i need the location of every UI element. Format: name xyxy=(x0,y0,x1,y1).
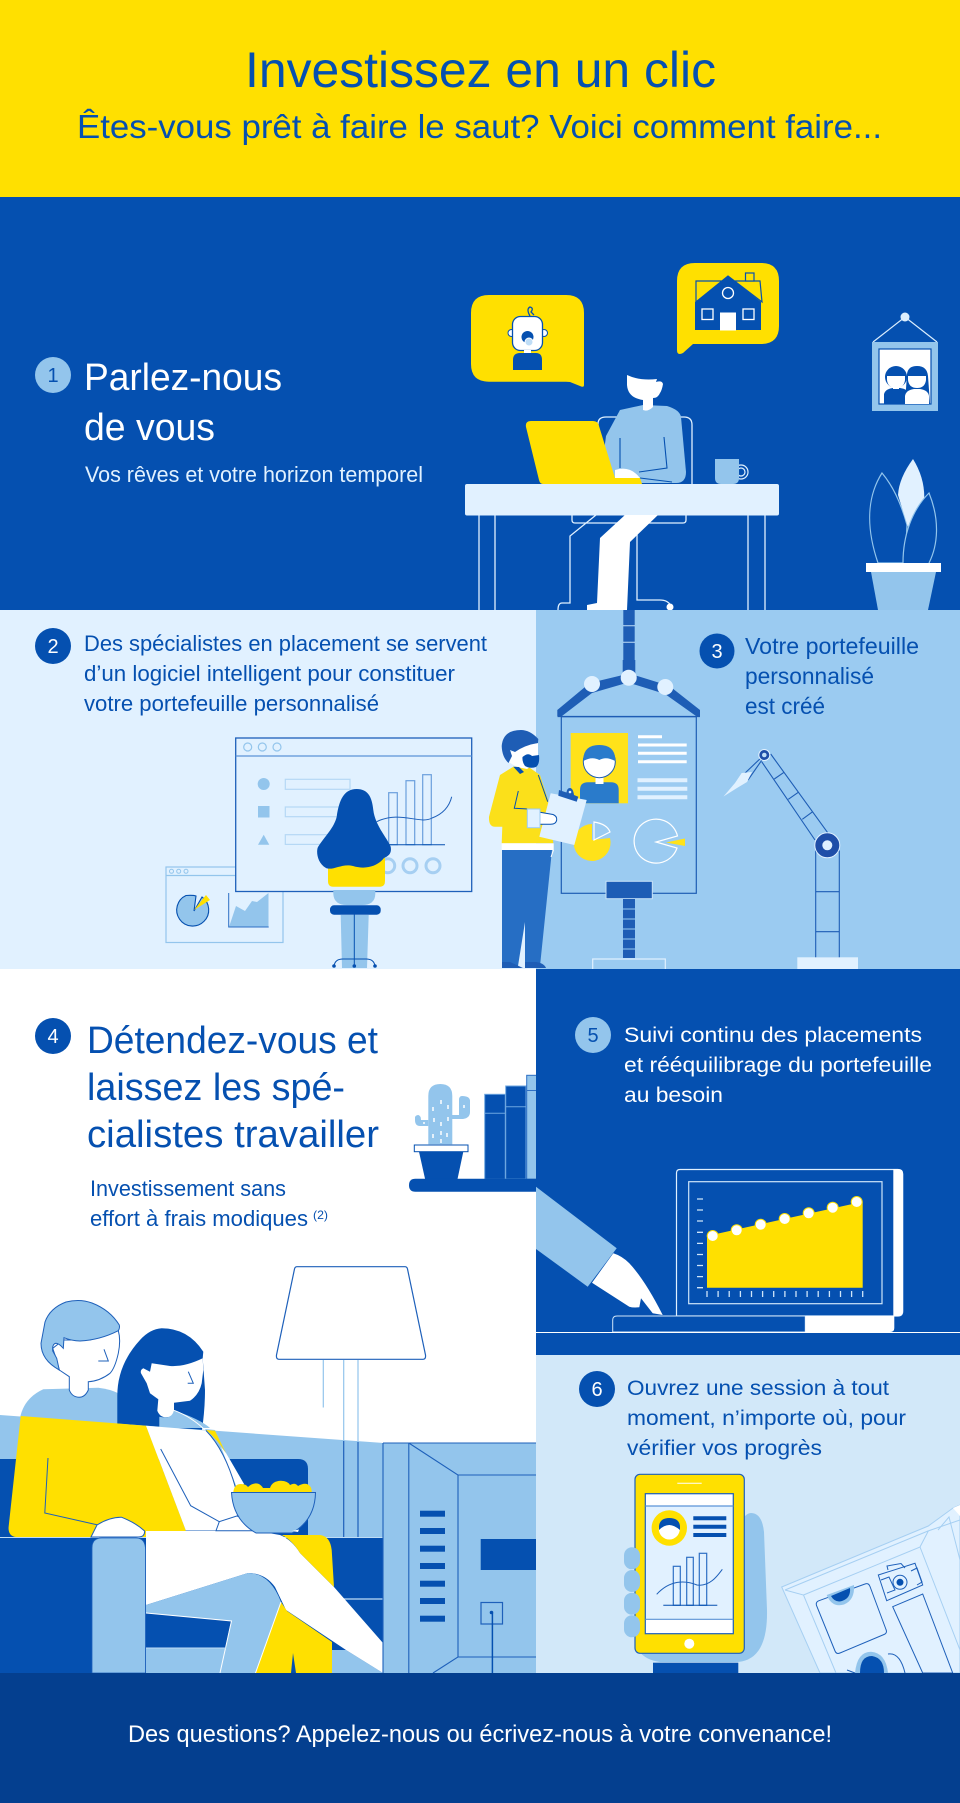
panel: step 6 xyxy=(536,1355,960,1674)
speech bubble: house xyxy=(677,263,779,354)
woman's leg xyxy=(146,1531,383,1673)
beard xyxy=(522,754,539,768)
face xyxy=(508,743,538,769)
step 3 badge xyxy=(700,634,734,668)
step 6 text: Ouvrez une session à tout xyxy=(627,1376,889,1400)
notebook xyxy=(893,1594,953,1673)
step 5 text xyxy=(624,1023,932,1107)
torso xyxy=(600,405,686,483)
woman's face xyxy=(141,1358,210,1431)
step 4 heading xyxy=(87,1020,379,1156)
step 1 heading xyxy=(84,357,282,449)
step 3 text: personnalisé xyxy=(745,663,874,689)
step 1 badge: 1 xyxy=(47,365,59,387)
portfolio board with robotic claw xyxy=(557,610,700,970)
panel: step 4 xyxy=(0,969,537,1673)
step 4 badge: 4 xyxy=(47,1026,59,1048)
small window: charts xyxy=(166,867,283,942)
panel: step 3 xyxy=(536,610,960,970)
speech bubble: baby xyxy=(471,295,584,387)
man's shirt xyxy=(20,1388,118,1428)
camera xyxy=(878,1563,923,1601)
main window: dashboard xyxy=(236,738,472,892)
hand holding phone xyxy=(624,1474,767,1674)
footer text: Des questions? Appelez-nous ou écrivez-nous à votre convenance! xyxy=(128,1721,832,1748)
step 2 badge: 2 xyxy=(47,636,59,658)
armrest xyxy=(92,1538,146,1673)
title: Investissez en un clic xyxy=(245,42,716,98)
step 3 text: Votre portefeuille xyxy=(745,633,919,659)
chair xyxy=(558,417,692,610)
cactus xyxy=(415,1084,470,1144)
panel: header xyxy=(0,0,960,197)
coffee cup xyxy=(715,459,748,484)
brochure on table xyxy=(782,1505,960,1673)
lamp xyxy=(276,1267,426,1442)
step 6 text: vérifier vos progrès xyxy=(627,1436,822,1460)
coin card xyxy=(816,1584,886,1653)
hand xyxy=(615,469,640,478)
step 4 badge xyxy=(35,1018,71,1054)
sofa seat xyxy=(0,1537,383,1673)
step 4 heading: cialistes travailler xyxy=(87,1114,379,1156)
yellow torso xyxy=(9,1416,186,1537)
pie chart: outline xyxy=(634,819,685,863)
head xyxy=(627,375,663,411)
step 2 text: Des spécialistes en placement se servent xyxy=(84,631,487,656)
living room scene xyxy=(0,1300,383,1673)
lens xyxy=(855,1652,888,1673)
laptop xyxy=(526,421,642,484)
portrait card xyxy=(571,733,628,803)
wall stripe xyxy=(0,1415,383,1673)
panel: footer xyxy=(0,1673,960,1803)
illustration: man with clipboard xyxy=(489,730,587,968)
man's leg xyxy=(146,1573,281,1673)
step 4 description xyxy=(90,1176,328,1231)
television xyxy=(383,1443,536,1673)
man's head xyxy=(41,1300,120,1397)
framed family picture xyxy=(872,312,938,411)
pie chart: yellow xyxy=(574,822,611,861)
robot arm xyxy=(724,750,858,969)
desk top xyxy=(465,484,779,516)
step 5 badge xyxy=(575,1017,611,1053)
step 3 text xyxy=(745,633,919,719)
step 4 description: effort à frais modiques xyxy=(90,1206,308,1231)
step 1 heading: de vous xyxy=(84,407,215,449)
step 5 text: Suivi continu des placements xyxy=(624,1023,922,1047)
step 5 text: et rééquilibrage du portefeuille xyxy=(624,1053,932,1077)
step 3 badge: 3 xyxy=(711,641,723,663)
step 1 badge xyxy=(35,357,71,393)
step 6 badge xyxy=(579,1371,615,1407)
desk legs xyxy=(479,515,765,610)
step 2 text: votre portefeuille personnalisé xyxy=(84,691,379,716)
step 6 badge: 6 xyxy=(591,1379,603,1401)
step 5 text: au besoin xyxy=(624,1083,723,1107)
pointing hand xyxy=(536,1187,663,1315)
hair xyxy=(502,730,538,763)
step 1 description: Vos rêves et votre horizon temporel xyxy=(85,462,423,487)
sweater xyxy=(489,767,553,843)
laptop with growth chart xyxy=(613,1169,903,1332)
panel: step 5 xyxy=(536,969,960,1355)
subtitle: Êtes-vous prêt à faire le saut? Voici comment faire... xyxy=(77,108,882,145)
step 4 heading: laissez les spé- xyxy=(87,1067,345,1109)
yellow legs xyxy=(282,1535,334,1587)
step 2 badge xyxy=(35,628,71,664)
clipboard xyxy=(539,788,587,845)
woman torso xyxy=(146,1426,238,1531)
woman on stool xyxy=(317,789,391,968)
step 4 heading: Détendez-vous et xyxy=(87,1020,378,1062)
step 1 heading: Parlez-nous xyxy=(84,357,282,399)
step 3 text: est créé xyxy=(745,693,825,719)
step 2 text xyxy=(84,631,487,716)
popcorn bowl xyxy=(232,1481,316,1533)
potted plant xyxy=(866,459,941,610)
step 4 description: Investissement sans xyxy=(90,1176,286,1201)
panel: step 1 xyxy=(0,197,960,610)
step 5 badge: 5 xyxy=(587,1025,599,1047)
desk scene: person at laptop xyxy=(465,375,779,610)
shelf with cactus and books xyxy=(409,1075,537,1192)
step 6 text xyxy=(627,1376,906,1460)
hands xyxy=(91,1517,145,1537)
step 6 text: moment, n’importe où, pour xyxy=(627,1406,906,1430)
step 4 description: (2) xyxy=(313,1208,328,1222)
leg xyxy=(587,515,658,610)
step 2 text: d’un logiciel intelligent pour constituer xyxy=(84,661,455,686)
woman's hair xyxy=(117,1328,205,1432)
light sliver behind woman's arm xyxy=(205,1429,244,1488)
panel: step 2 xyxy=(0,610,536,969)
sofa back xyxy=(0,1459,308,1538)
